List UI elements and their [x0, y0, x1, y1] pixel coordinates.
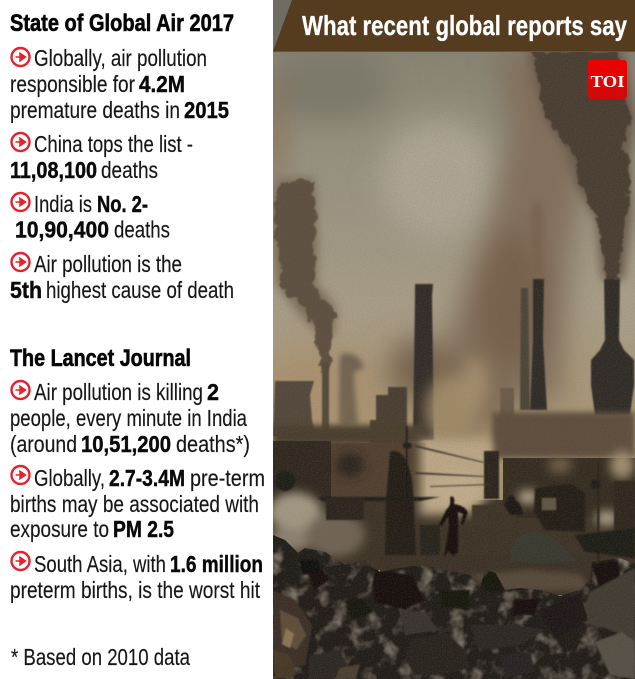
coal heap mid	[510, 532, 572, 562]
bullet: 2 people every minute: 2	[207, 379, 219, 405]
chimney: thin	[520, 288, 530, 410]
bullet: 4.2M premature deaths: premature deaths in	[10, 97, 180, 123]
bullet: India is No. 2: 10,90,400	[15, 216, 109, 242]
bullet: pre-term births: Globally,	[34, 465, 105, 491]
barrel	[420, 525, 440, 555]
second worker	[504, 495, 523, 515]
bullet: pre-term births: pre-term	[190, 465, 265, 491]
bullet: India is No. 2: India is	[34, 191, 92, 217]
plume: left smoke	[270, 178, 336, 372]
bullet: 4.2M premature deaths	[10, 45, 229, 123]
bullet: pre-term births: births may be associated with	[10, 491, 259, 517]
bullet: China tops the list	[10, 131, 193, 183]
bullet: 2 people every minute	[10, 379, 250, 457]
buildings behind	[370, 387, 514, 445]
factory skyline smog	[273, 412, 635, 458]
heading: The Lancet Journal: The Lancet Journal	[10, 345, 191, 372]
panel: The Lancet Journal	[10, 345, 265, 603]
cooling tower	[273, 381, 316, 436]
chimney: right with flared base	[591, 279, 634, 415]
bullet: pre-term births	[10, 465, 265, 542]
heading: State of Global Air 2017: State of Global Air 2017	[10, 10, 234, 37]
diffuse central brown smoke	[388, 52, 590, 430]
wall: middle	[331, 443, 426, 498]
bullet: 4.2M premature deaths: Globally, air pollution	[34, 45, 207, 71]
bullet: India is No. 2	[12, 191, 170, 242]
chimneys	[322, 279, 634, 440]
bullet: 5th highest cause of death: Air pollution is the	[34, 251, 182, 277]
wall: left dark	[273, 441, 331, 501]
bullet: pre-term births: exposure to	[10, 516, 109, 542]
icon: red arrow bullet	[12, 466, 30, 484]
panel: State of Global Air 2017	[10, 10, 234, 303]
bullet: South Asia	[10, 551, 263, 603]
panel: white text column background	[0, 0, 273, 679]
header: brown slanted banner	[273, 0, 635, 52]
bullet: 4.2M premature deaths: 4.2M	[139, 71, 185, 97]
steam lower	[420, 440, 495, 515]
photo: industrial smokestacks and coal rubble	[273, 52, 635, 679]
tower: dark box	[484, 451, 499, 499]
bullet: 4.2M premature deaths: 2015	[184, 97, 229, 123]
bullet: 2 people every minute: Air pollution is killing	[34, 379, 203, 405]
chimney: left far	[342, 362, 358, 425]
bullet: India is No. 2: deaths	[114, 216, 170, 242]
brick stack	[471, 504, 516, 520]
bullet: 5th highest cause of death: 5th	[10, 277, 42, 303]
rubble foreground	[273, 530, 635, 679]
steam and smoke near ground	[268, 451, 634, 557]
dark lump left	[275, 471, 295, 491]
footnote: * Based on 2010 data	[11, 644, 191, 670]
wall: right dark	[503, 458, 635, 500]
icon: red arrow bullet	[12, 552, 30, 570]
bullet: China tops the list: 11,08,100	[10, 157, 97, 183]
chimney: left thin	[322, 362, 329, 430]
bullet: 5th highest cause of death	[10, 251, 234, 303]
bullet: pre-term births: 2.7-3.4M	[109, 465, 185, 491]
sky	[273, 52, 635, 596]
excavator	[534, 484, 585, 532]
centre steam column	[426, 357, 489, 444]
bullet: 5th highest cause of death: highest cause of death	[46, 277, 234, 303]
bullet: pre-term births: PM 2.5	[113, 516, 174, 542]
pole and scaffold	[318, 426, 490, 501]
worker silhouette	[439, 496, 468, 556]
chimney: centre	[413, 284, 434, 440]
bullet: 2 people every minute: people, every minute in India	[10, 405, 248, 431]
logo: TOI	[588, 60, 627, 99]
lower centre area	[273, 500, 635, 570]
icon: red arrow bullet	[12, 253, 30, 271]
bullet: South Asia: South Asia, with	[34, 551, 166, 577]
bullet: South Asia: 1.6 million	[170, 551, 263, 577]
bullet: 2 people every minute: deaths*)	[176, 431, 250, 457]
logo: TOI: TOI	[590, 72, 625, 91]
icon: red arrow bullet	[12, 48, 30, 66]
plume: rising from centre chimney	[532, 203, 544, 244]
icon: red arrow bullet	[12, 193, 30, 211]
bullet: India is No. 2: No. 2-	[97, 191, 148, 217]
rocks	[273, 560, 635, 679]
bullet: 2 people every minute: 10,51,200	[81, 431, 171, 457]
plume: dark right smoke	[526, 50, 635, 282]
photo grain	[273, 52, 635, 679]
machinery and structures	[275, 426, 635, 562]
bullet: 2 people every minute: (around	[10, 431, 77, 457]
right machine	[614, 481, 635, 531]
icon: red arrow bullet	[12, 381, 30, 399]
icon: red arrow bullet	[12, 133, 30, 151]
bullet: China tops the list: deaths	[101, 157, 158, 183]
utility pole	[597, 462, 600, 594]
bullet: South Asia: preterm births, is the worst hit	[10, 577, 260, 603]
ground	[380, 570, 592, 595]
furnace block	[326, 498, 364, 520]
chimney: tall dark	[530, 279, 547, 410]
bullet: China tops the list: China tops the list -	[34, 131, 193, 157]
plume: small far smoke	[340, 353, 364, 425]
furnace silhouette	[385, 451, 416, 555]
bullet: 4.2M premature deaths: responsible for	[10, 71, 135, 97]
